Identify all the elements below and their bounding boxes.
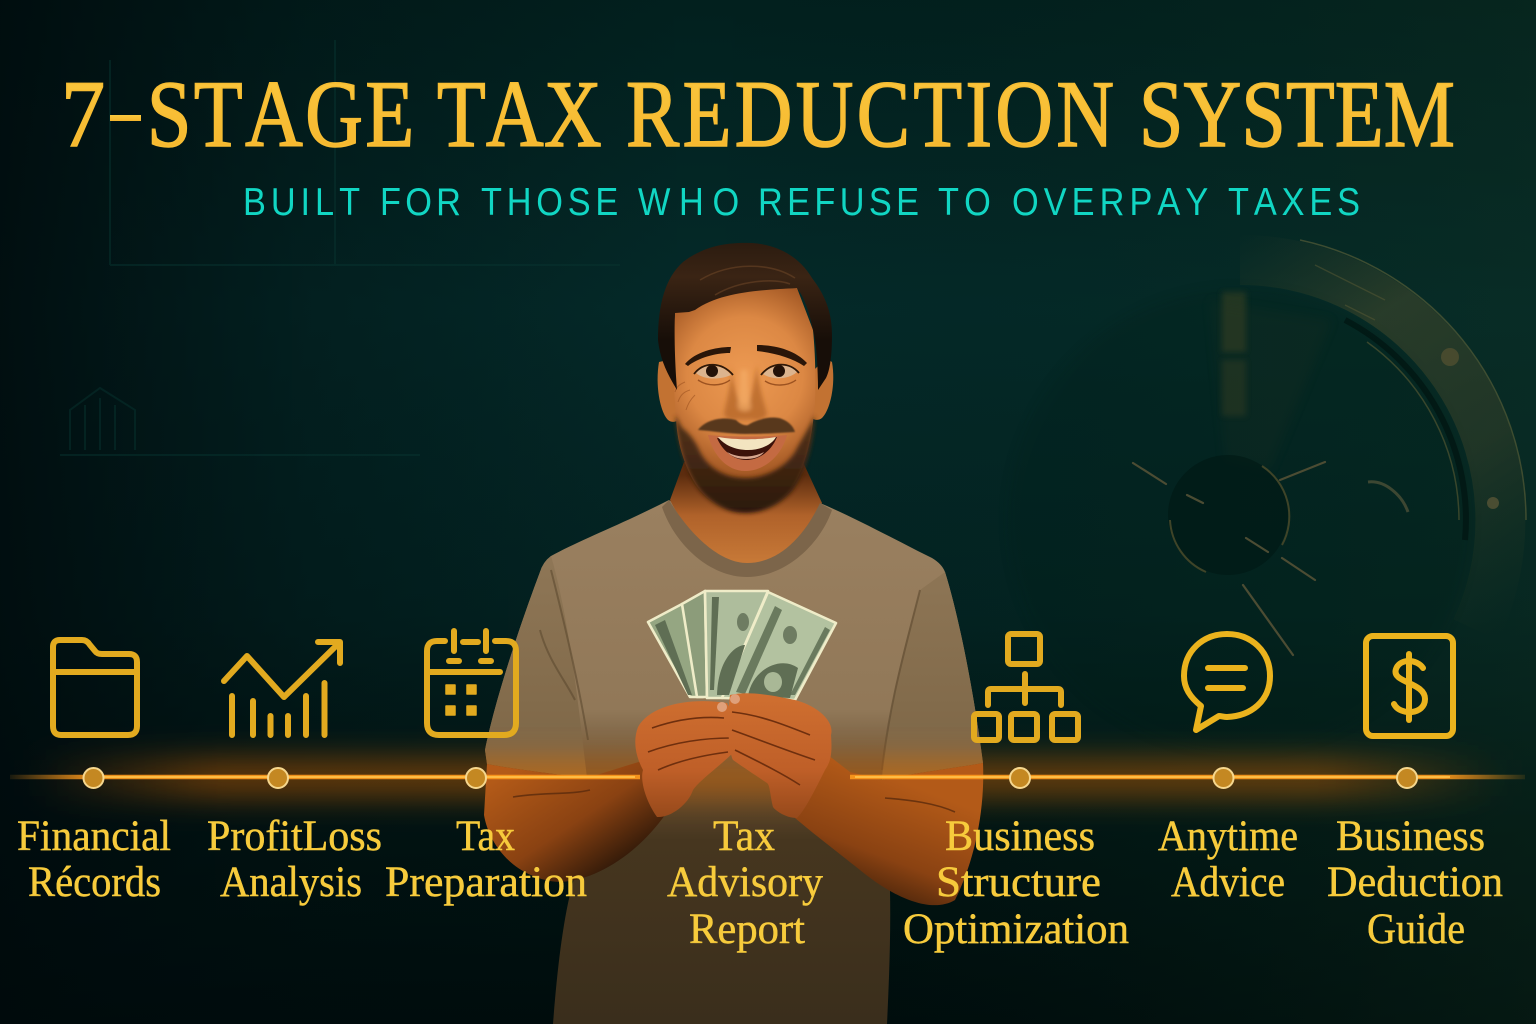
timeline dots bbox=[84, 768, 1417, 788]
subtitle bbox=[243, 180, 1360, 223]
subtitle: BUILT bbox=[243, 180, 360, 223]
label: Business Structure Optimization: Business bbox=[945, 813, 1095, 860]
subtitle: THOSE bbox=[481, 180, 618, 223]
label: Business Structure Optimization: Structure bbox=[936, 859, 1101, 906]
left forearm bbox=[484, 760, 665, 882]
subtitle: TO bbox=[938, 180, 991, 223]
left ear bbox=[658, 360, 678, 422]
arm creases bbox=[513, 790, 955, 812]
label: Business Deduction Guide: Deduction bbox=[1327, 859, 1503, 906]
collar bbox=[662, 500, 832, 577]
lower inner lip bbox=[727, 452, 764, 459]
nose shading bbox=[724, 365, 767, 420]
right hand bbox=[728, 693, 832, 818]
title: SYSTEM bbox=[1139, 62, 1455, 167]
label: Anytime Advice bbox=[1158, 813, 1298, 906]
left sleeve bbox=[485, 556, 587, 778]
label: Business Deduction Guide: Guide bbox=[1367, 906, 1465, 953]
label: Tax Preparation bbox=[385, 813, 587, 906]
teeth bbox=[718, 437, 776, 450]
stage labels bbox=[17, 813, 1503, 953]
icon: org structure bbox=[974, 634, 1078, 740]
title: 7 bbox=[61, 61, 105, 167]
subtitle: FOR bbox=[380, 180, 461, 223]
left hand bbox=[635, 701, 733, 817]
glow on band bbox=[0, 760, 1536, 796]
label: Business Structure Optimization bbox=[903, 813, 1129, 953]
right sleeve bbox=[882, 572, 983, 780]
label: Tax Advisory Report bbox=[667, 813, 823, 953]
crow's feet bbox=[675, 382, 695, 410]
shirt folds bbox=[540, 570, 920, 770]
mouth bbox=[708, 435, 787, 471]
label: Business Structure Optimization: Optimization bbox=[903, 906, 1129, 953]
label: Tax Advisory Report: Report bbox=[689, 906, 805, 953]
right ear bbox=[812, 358, 833, 420]
right eye bbox=[761, 365, 799, 385]
title: REDUCTION bbox=[626, 62, 1114, 167]
eyebrows bbox=[685, 345, 807, 366]
hair bbox=[658, 243, 832, 390]
bill details bbox=[655, 597, 830, 698]
icon: profit chart bbox=[224, 642, 340, 735]
icon: calendar bbox=[427, 631, 516, 735]
label: Tax Preparation: Preparation bbox=[385, 859, 587, 906]
t-shirt bbox=[485, 500, 983, 1024]
bill 1 bbox=[648, 604, 703, 697]
icon: dollar document bbox=[1366, 636, 1453, 736]
label: ProfitLoss Analysis bbox=[207, 813, 382, 906]
beard bbox=[675, 415, 815, 513]
hair highlights bbox=[700, 266, 795, 295]
faint building backdrop bbox=[60, 40, 620, 455]
label: Business Deduction Guide: Business bbox=[1336, 813, 1485, 860]
face bbox=[674, 288, 815, 512]
icon: folder bbox=[53, 640, 137, 735]
bill 2 bbox=[682, 591, 707, 697]
subtitle: WHO bbox=[638, 180, 739, 223]
label: ProfitLoss Analysis: Analysis bbox=[220, 859, 362, 906]
title bbox=[61, 61, 1455, 167]
label: ProfitLoss Analysis: ProfitLoss bbox=[207, 813, 382, 860]
moustache bbox=[698, 418, 795, 434]
icon: speech bubble bbox=[1184, 634, 1270, 730]
title: TAX bbox=[437, 62, 602, 167]
subtitle: REFUSE bbox=[758, 180, 919, 223]
right forearm bbox=[795, 755, 983, 905]
bill 4 bbox=[722, 592, 836, 700]
subtitle: OVERPAY bbox=[1012, 180, 1208, 223]
vault door bbox=[1008, 240, 1526, 752]
label: Business Deduction Guide bbox=[1327, 813, 1503, 953]
label: Financial Records: Récords bbox=[28, 859, 161, 906]
label: Tax Advisory Report: Tax bbox=[713, 813, 775, 860]
subtitle: TAXES bbox=[1228, 180, 1360, 223]
timeline line bbox=[10, 775, 1525, 779]
title: STAGE bbox=[147, 62, 414, 167]
left eye bbox=[694, 365, 733, 385]
cash fan bbox=[648, 591, 836, 700]
neck bbox=[670, 462, 822, 565]
label: Tax Advisory Report: Advisory bbox=[667, 859, 823, 906]
label: Anytime Advice: Advice bbox=[1171, 859, 1285, 906]
bill 3 bbox=[705, 591, 768, 698]
man holding cash bbox=[0, 243, 1536, 1024]
label: Financial Records: Financial bbox=[17, 813, 171, 860]
label: Tax Preparation: Tax bbox=[456, 813, 515, 860]
label: Financial Records bbox=[17, 813, 171, 906]
label: Anytime Advice: Anytime bbox=[1158, 813, 1298, 860]
